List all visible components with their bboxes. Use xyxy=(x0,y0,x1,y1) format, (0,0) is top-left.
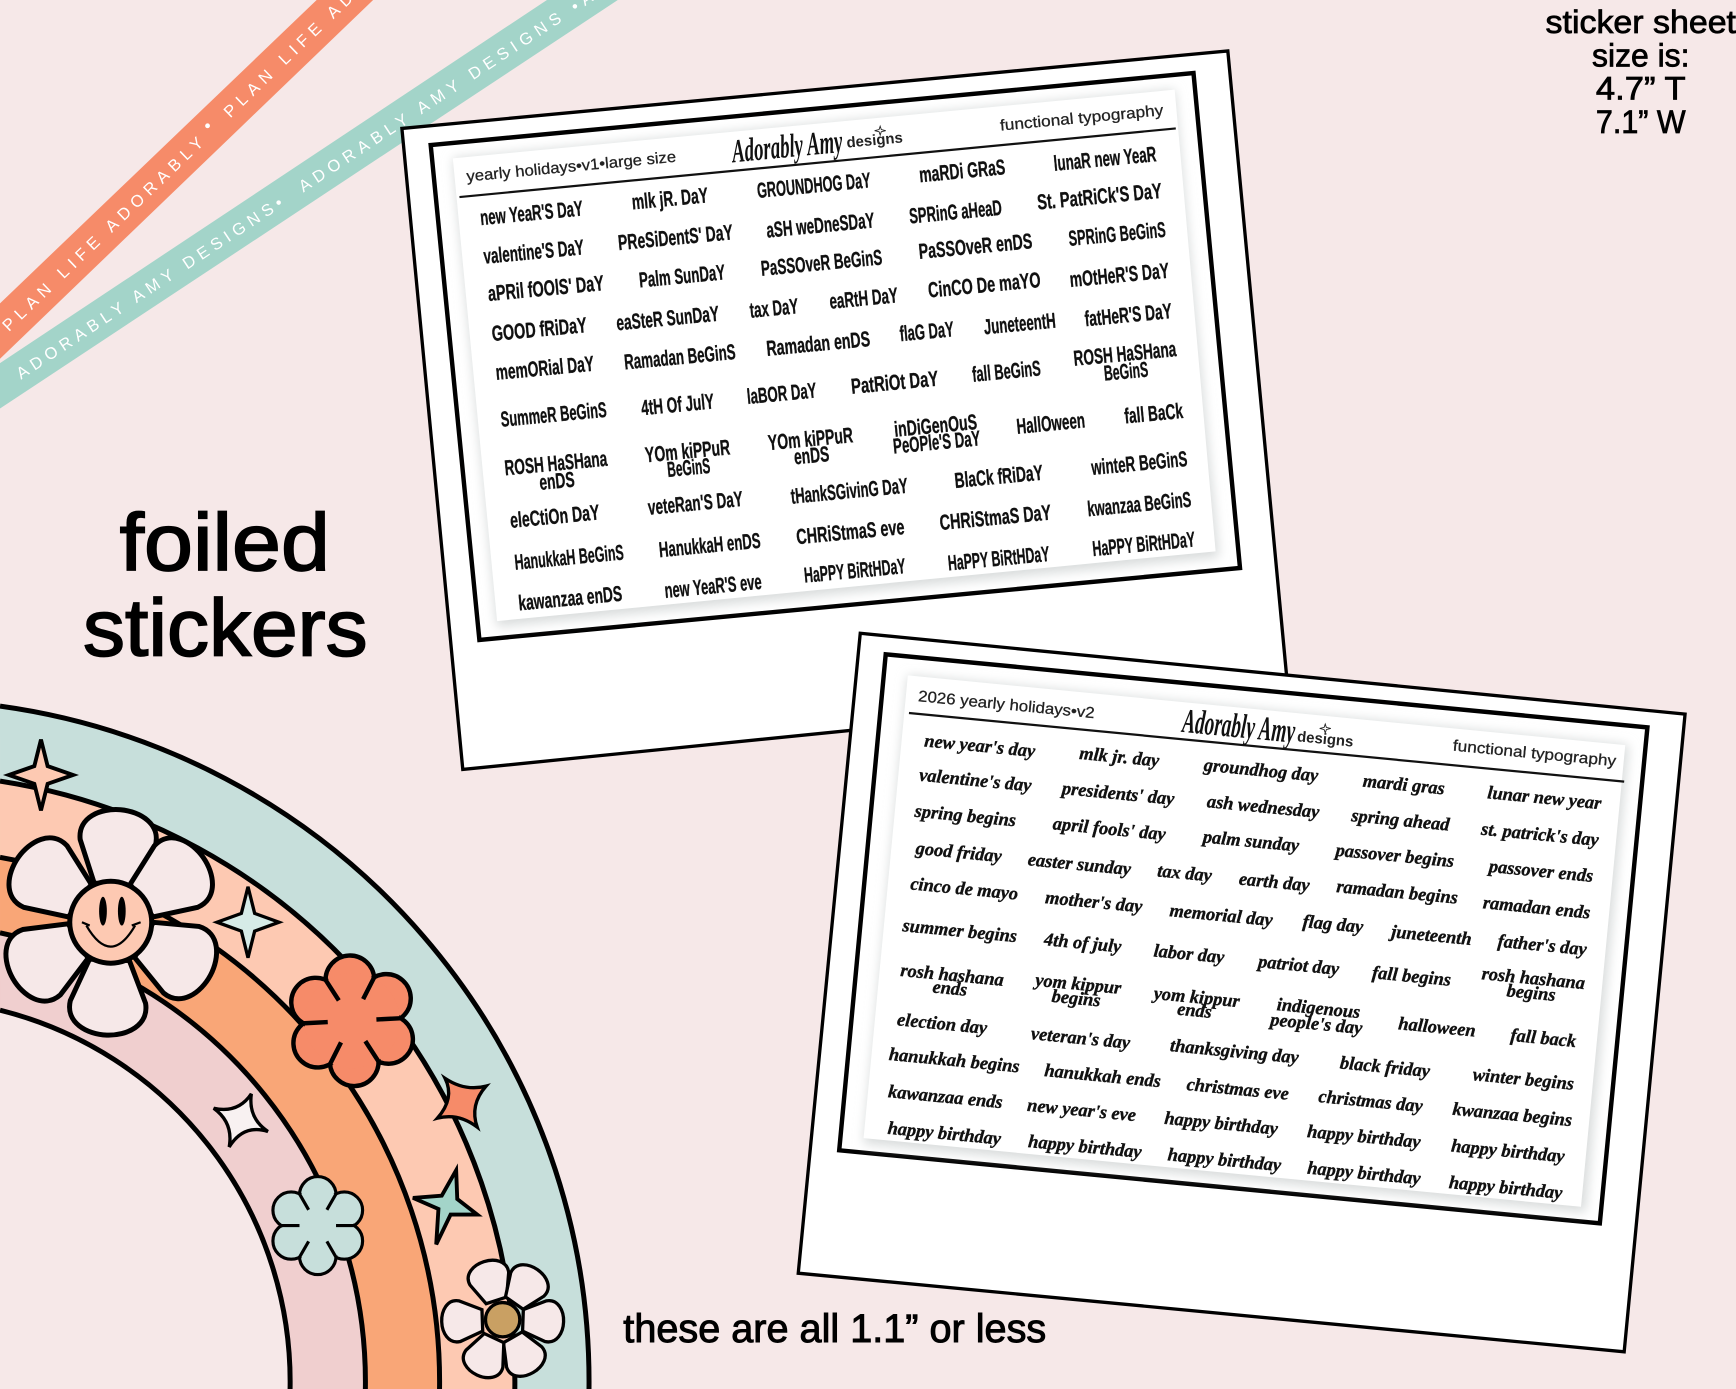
sticker words v1: flaG DaY xyxy=(898,316,955,346)
sticker words v2: easter sunday xyxy=(1027,849,1133,879)
icon: peach sparkle xyxy=(9,740,73,810)
sticker words v2: juneteenth xyxy=(1387,921,1473,949)
sticker words v2: ash wednesday xyxy=(1206,791,1321,822)
sticker words v1: enDS xyxy=(793,441,830,469)
sticker words v2: groundhog day xyxy=(1202,755,1320,786)
sticker words v2: spring ahead xyxy=(1350,805,1451,835)
sticker words v1: GROUNDHOG DaY xyxy=(756,167,872,203)
sticker words v2: new year's eve xyxy=(1026,1095,1137,1125)
sticker words v2: ramadan begins xyxy=(1336,876,1459,908)
backing card 1 xyxy=(402,51,1288,769)
header 1: designs xyxy=(846,129,904,152)
header 1 xyxy=(466,102,1164,185)
sticker words v2: happy birthday xyxy=(1448,1172,1564,1203)
sticker words v2: patriot day xyxy=(1255,951,1341,979)
sticker words v2: passover ends xyxy=(1486,856,1594,886)
sticker words v1: eaSteR SunDaY xyxy=(615,301,720,335)
sticker words v1: tHankSGivinG DaY xyxy=(790,473,909,509)
sticker words v2: hanukkah ends xyxy=(1044,1060,1162,1091)
header 2: 2026 yearly holidays•v2 xyxy=(917,688,1095,722)
caption: these are all 1.1 or less: these are all 1.1” or less xyxy=(623,1307,1046,1351)
size note: sticker sheet dimensions: size is: xyxy=(1592,37,1689,73)
sticker words v1: new YeaR'S DaY xyxy=(479,196,584,230)
ribbon: teal adorably amy designs xyxy=(0,0,618,409)
ribbon: coral plan life adorably: PLAN LIFE ADORABLY xyxy=(0,133,207,335)
size note: sticker sheet dimensions: sticker sheet xyxy=(1546,4,1736,40)
sticker words v1: aSH weDneSDaY xyxy=(765,207,876,243)
sticker words v2: mlk jr. day xyxy=(1079,743,1161,771)
sticker words v2: labor day xyxy=(1153,940,1226,967)
sticker words v2: yom kippur xyxy=(1032,970,1123,998)
sticker words v1: laBOR DaY xyxy=(746,378,818,409)
sticker words v1: PaSSOveR BeGinS xyxy=(760,244,883,281)
sticker words v1: kawanzaa enDS xyxy=(517,581,623,615)
header rule 1 xyxy=(459,128,1176,197)
sticker words v2: ends xyxy=(932,977,968,1000)
sticker words v2: presidents' day xyxy=(1059,778,1176,809)
header 2: Adorably Amy xyxy=(1180,702,1297,751)
heading: foiled stickers: foiled xyxy=(120,498,330,588)
sticker words v2: 4th of july xyxy=(1042,929,1123,957)
sticker words v2: lunar new year xyxy=(1487,782,1603,813)
icon: coral curved star xyxy=(437,1078,486,1127)
sticker words v1: enDS xyxy=(538,467,576,495)
sticker words v2: black friday xyxy=(1339,1052,1432,1081)
sticker words v1: memORial DaY xyxy=(494,351,595,385)
sticker words v1: mlk jR. DaY xyxy=(631,182,709,214)
sticker words v1: YOm kiPPuR xyxy=(644,434,731,467)
sticker words v1: HaPPY BiRtHDaY xyxy=(947,541,1051,575)
sticker words v2: happy birthday xyxy=(887,1118,1003,1149)
sticker words v2: fall back xyxy=(1510,1025,1578,1051)
sticker words v2: memorial day xyxy=(1169,900,1274,930)
sticker words v2: thanksgiving day xyxy=(1169,1035,1300,1067)
header 1: yearly holidays•v1•large size xyxy=(466,149,677,185)
ribbon: coral plan life adorably xyxy=(0,0,429,359)
sticker words v1 xyxy=(479,141,1196,615)
sticker words v1: CinCO De maYO xyxy=(927,267,1042,303)
sticker words v1: HallOween xyxy=(1015,407,1086,439)
header rule 2 xyxy=(909,713,1624,782)
sticker words v1: maRDi GRaS xyxy=(918,154,1006,187)
sticker words v2: christmas eve xyxy=(1186,1074,1290,1104)
sticker words v2: passover begins xyxy=(1333,840,1455,871)
sticker words v2: mardi gras xyxy=(1362,771,1446,798)
sticker area shadow 2 xyxy=(864,675,1629,1212)
sticker words v2: hanukkah begins xyxy=(888,1044,1021,1076)
logo sparkle 2 xyxy=(1320,724,1331,733)
ribbon: coral plan life adorably: • xyxy=(199,117,216,135)
sticker words v2: begins xyxy=(1506,980,1556,1005)
ribbon: teal adorably amy designs: ADORABLY AMY DESIGNS• xyxy=(13,193,287,383)
sticker words v1: 4tH Of JulY xyxy=(640,388,715,420)
header 1: Adorably Amy xyxy=(729,123,844,170)
sticker words v1: PatRiOt DaY xyxy=(850,366,940,399)
sticker words v1: HaPPY BiRtHDaY xyxy=(803,553,907,588)
size note: sticker sheet dimensions: 7.1” W xyxy=(1596,104,1686,140)
sticker area shadow 1 xyxy=(453,90,1219,627)
sticker words v1: BlaCk fRiDaY xyxy=(953,460,1044,493)
sticker words v1: GOOD fRiDaY xyxy=(491,312,588,346)
sticker words v1: YOm kiPPuR xyxy=(767,422,854,455)
sticker area 2 xyxy=(864,675,1625,1207)
sticker words v1: St. PatRiCk'S DaY xyxy=(1036,178,1163,215)
rainbow xyxy=(0,706,589,1389)
sticker words v1: SummeR BeGinS xyxy=(499,397,608,432)
icon: coral flower xyxy=(289,952,415,1089)
icon: white curved star xyxy=(214,1094,268,1147)
sticker words v2: kwanzaa begins xyxy=(1452,1099,1573,1130)
sticker words v2: happy birthday xyxy=(1164,1108,1280,1139)
sticker words v2: new year's day xyxy=(924,730,1037,761)
sticker words v2: earth day xyxy=(1238,869,1311,895)
sticker words v1: winteR BeGinS xyxy=(1090,446,1188,480)
sticker words v2: ramadan ends xyxy=(1482,892,1591,922)
icon: smiley daisy xyxy=(0,806,228,1036)
icon: mint sparkle xyxy=(217,887,279,958)
sticker words v1: PeOPle'S DaY xyxy=(892,425,982,459)
sticker words v2: yom kippur xyxy=(1151,983,1242,1011)
sticker words v2: happy birthday xyxy=(1167,1144,1283,1175)
sticker words v2: st. patrick's day xyxy=(1479,819,1600,850)
sticker words v2: good friday xyxy=(914,838,1003,866)
sticker words v2: halloween xyxy=(1398,1013,1477,1041)
sticker words v2: ends xyxy=(1176,999,1213,1022)
sticker words v1: valentine'S DaY xyxy=(482,234,585,269)
sticker words v1: BeGinS xyxy=(666,453,711,482)
sticker words v2: flag day xyxy=(1302,911,1365,937)
sticker words v1: HanukkaH BeGinS xyxy=(513,540,625,575)
header 1: functional typography xyxy=(999,102,1164,135)
sticker words v1: fall BaCk xyxy=(1123,398,1185,428)
icon: gold centre daisy xyxy=(441,1255,564,1384)
sticker words v1: PaSSOveR enDS xyxy=(917,228,1033,264)
sticker words v2: summer begins xyxy=(901,915,1018,946)
sticker words v1: SPRinG BeGinS xyxy=(1067,217,1167,251)
size note: sticker sheet dimensions xyxy=(1546,4,1736,140)
sticker words v1: tax DaY xyxy=(748,293,800,323)
sticker words v1: fatHeR'S DaY xyxy=(1083,298,1173,331)
inner frame 1 xyxy=(431,73,1240,640)
sticker sheet 2: 2026 yearly holidays v2 xyxy=(798,633,1685,1352)
sticker sheet 1: large size yearly holidays xyxy=(402,51,1288,769)
backing card 2 xyxy=(798,633,1685,1352)
sticker words v2: happy birthday xyxy=(1306,1158,1422,1189)
sticker words v2: indigenous xyxy=(1276,994,1361,1022)
sticker words v1: BeGinS xyxy=(1103,357,1149,386)
sticker words v2 xyxy=(887,730,1603,1203)
sticker words v2: election day xyxy=(896,1009,989,1038)
sticker words v1: fall BeGinS xyxy=(971,355,1042,387)
sticker words v2: rosh hashana xyxy=(1481,963,1586,993)
sticker words v1: CHRiStmaS eve xyxy=(795,514,905,549)
icon: mint star xyxy=(413,1170,477,1244)
sticker words v1: ROSH HaSHana xyxy=(1072,336,1178,371)
sticker area 1 xyxy=(453,90,1216,621)
sticker words v1: Palm SunDaY xyxy=(638,259,727,292)
sticker words v1: veteRan'S DaY xyxy=(647,486,744,520)
logo sparkle 1 xyxy=(875,126,886,135)
sticker words v2: begins xyxy=(1051,986,1101,1010)
sticker words v2: people's day xyxy=(1268,1009,1364,1038)
sticker words v1: aPRil fOOlS' DaY xyxy=(487,270,605,306)
sticker words v2: mother's day xyxy=(1044,887,1144,917)
sticker words v1: CHRiStmaS DaY xyxy=(938,500,1053,535)
sticker words v2: father's day xyxy=(1497,931,1588,959)
sticker words v2: cinco de mayo xyxy=(910,873,1019,904)
sticker words v2: happy birthday xyxy=(1306,1121,1422,1152)
sticker words v1: JuneteentH xyxy=(983,308,1057,339)
sticker words v2: kawanzaa ends xyxy=(887,1081,1004,1112)
sticker words v1: HaPPY BiRtHDaY xyxy=(1091,527,1196,561)
header 2: functional typography xyxy=(1452,738,1617,770)
inner frame 2 xyxy=(839,654,1647,1223)
icon: mint flower xyxy=(273,1177,363,1275)
heading: foiled stickers xyxy=(83,498,368,673)
sticker words v1: SPRinG aHeaD xyxy=(908,195,1003,229)
header 2 xyxy=(917,688,1617,770)
sticker words v2: tax day xyxy=(1157,860,1214,886)
sticker words v1: PReSiDentS' DaY xyxy=(617,219,734,255)
sticker words v2: palm sunday xyxy=(1200,826,1301,856)
sticker words v2: april fools' day xyxy=(1052,813,1168,844)
sticker words v1: lunaR new YeaR xyxy=(1052,141,1158,176)
sticker words v1: mOtHeR'S DaY xyxy=(1069,258,1170,292)
size note: sticker sheet dimensions: 4.7” T xyxy=(1596,71,1686,107)
sticker words v2: veteran's day xyxy=(1030,1023,1132,1053)
header 2: designs xyxy=(1296,728,1354,751)
sticker words v1: Ramadan BeGinS xyxy=(623,339,737,374)
sticker words v1: eaRtH DaY xyxy=(828,282,899,314)
sticker words v2: happy birthday xyxy=(1027,1131,1143,1162)
sticker words v2: fall begins xyxy=(1371,962,1452,990)
sticker words v1: Ramadan enDS xyxy=(765,326,871,361)
sticker words v2: happy birthday xyxy=(1450,1136,1566,1166)
heading: foiled stickers: stickers xyxy=(83,583,368,673)
sticker words v1: inDiGenOuS xyxy=(893,409,978,442)
sticker words v2: rosh hashana xyxy=(900,960,1005,990)
sticker words v1: kwanzaa BeGinS xyxy=(1086,487,1192,521)
sticker words v2: spring begins xyxy=(913,801,1017,830)
sticker words v1: HanukkaH enDS xyxy=(658,528,762,562)
sticker words v2: winter begins xyxy=(1472,1064,1575,1094)
sticker words v2: christmas day xyxy=(1318,1086,1424,1116)
sticker words v1: new YeaR'S eve xyxy=(663,569,763,603)
sticker words v1: eleCtiOn DaY xyxy=(509,499,601,533)
sticker words v2: valentine's day xyxy=(918,765,1033,795)
sticker words v1: ROSH HaSHana xyxy=(503,446,609,480)
